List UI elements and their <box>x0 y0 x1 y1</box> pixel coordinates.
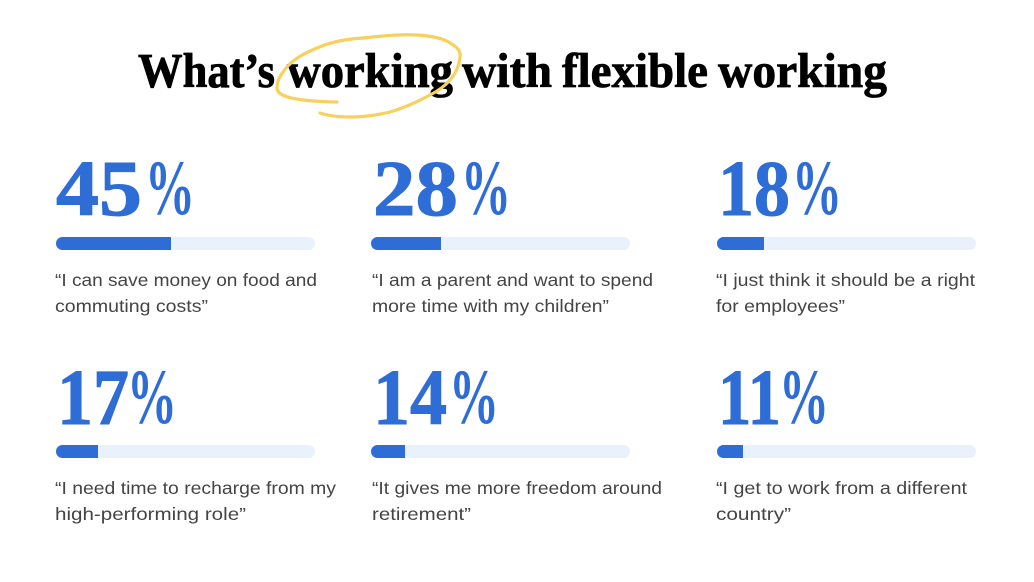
yellow hand-drawn circle around the word working <box>277 35 460 117</box>
quote: “I can save money on food and <box>55 270 317 290</box>
title: working <box>718 43 887 98</box>
title: with <box>462 43 552 98</box>
quote <box>55 478 336 524</box>
number 14%: 14 <box>373 355 447 442</box>
number 45%: % <box>145 144 195 231</box>
title: flexible <box>562 43 708 98</box>
number 14% <box>373 353 499 442</box>
quote: commuting costs” <box>55 296 208 316</box>
number 18%: % <box>792 144 842 231</box>
number 11% <box>718 353 829 442</box>
quote: “It gives me more freedom around <box>372 478 662 498</box>
quote <box>716 270 975 316</box>
number 11%: 11 <box>718 355 781 442</box>
stat: 11 percent <box>716 353 976 524</box>
quote: “I am a parent and want to spend <box>372 270 653 290</box>
progress bar 17% <box>56 445 315 458</box>
quote <box>55 270 317 316</box>
number 45%: 45 <box>56 146 142 233</box>
stat: 45 percent <box>55 144 317 316</box>
number 17% <box>57 353 177 442</box>
number 17%: 17 <box>57 355 129 442</box>
quote: “I just think it should be a right <box>716 270 975 290</box>
progress bar 45% <box>56 237 315 250</box>
progress bar 28% <box>371 237 630 250</box>
quote: more time with my children” <box>372 296 609 316</box>
progress bar 14% <box>371 445 630 458</box>
progress bar 18% <box>717 237 976 250</box>
quote: country” <box>716 504 791 524</box>
stat: 18 percent <box>716 144 976 316</box>
title: What’s <box>138 43 275 98</box>
stat: 17 percent <box>55 353 336 524</box>
quote: retirement” <box>372 504 471 524</box>
stat: 28 percent <box>371 144 653 316</box>
number 18%: 18 <box>718 146 790 233</box>
number 14%: % <box>449 353 499 440</box>
quote <box>716 478 967 524</box>
number 11%: % <box>779 353 829 440</box>
quote: for employees” <box>716 296 845 316</box>
number 45% <box>56 144 195 233</box>
number 28%: 28 <box>373 146 458 233</box>
quote: high-performing role” <box>55 504 246 524</box>
quote: “I need time to recharge from my <box>55 478 336 498</box>
number 28%: % <box>461 144 511 231</box>
title: working <box>287 43 453 98</box>
quote <box>372 270 653 316</box>
quote: “I get to work from a different <box>716 478 967 498</box>
title <box>138 43 887 98</box>
quote <box>372 478 662 524</box>
number 18% <box>718 144 842 233</box>
number 28% <box>373 144 511 233</box>
progress bar 11% <box>717 445 976 458</box>
stat: 14 percent <box>371 353 662 524</box>
number 17%: % <box>127 353 177 440</box>
